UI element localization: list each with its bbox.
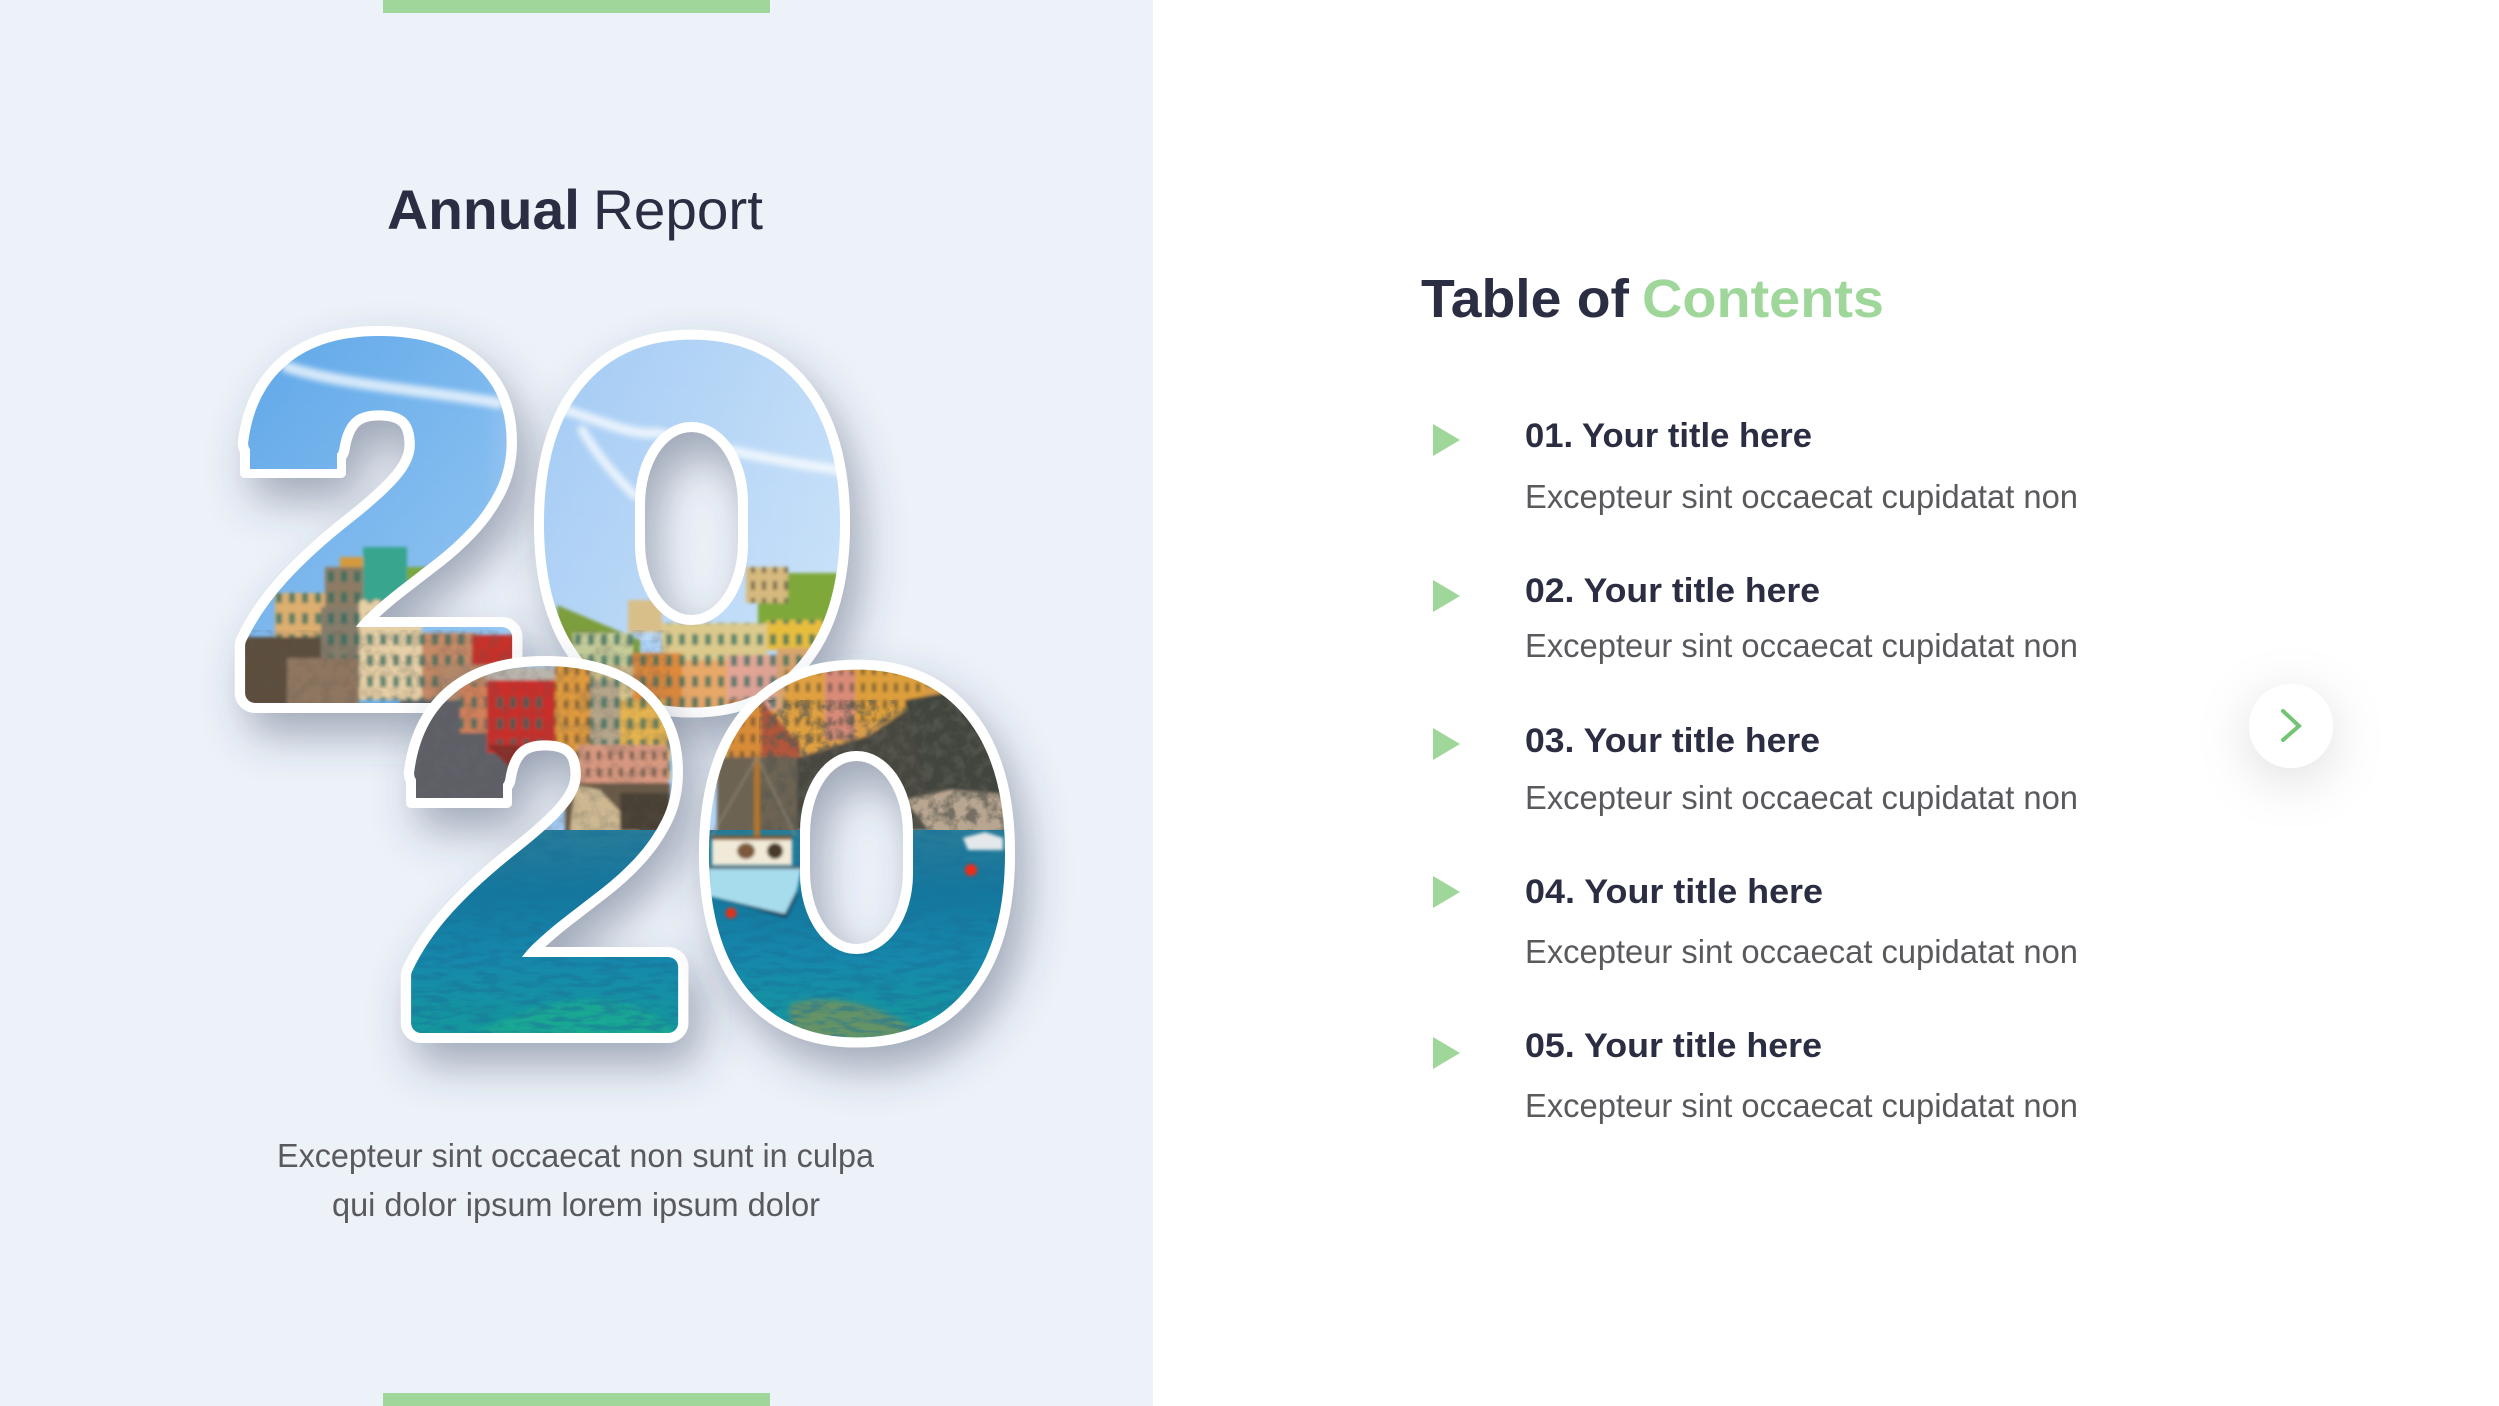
contents item 05: Excepteur sint occaecat cupidatat non <box>1525 1087 2078 1124</box>
contents item 03: 03. Your title here <box>1525 722 1820 760</box>
contents item 01 <box>1433 417 2078 515</box>
contents item 02: 02. Your title here <box>1525 572 1820 610</box>
icon: chevron <box>2283 711 2299 740</box>
icon: triangle <box>1433 424 1460 456</box>
contents item 03: Excepteur sint occaecat cupidatat non <box>1525 779 2078 816</box>
numeral: second 2 <box>384 650 730 1094</box>
contents item 05: 05. Your title here <box>1525 1027 1822 1065</box>
heading: table of contents <box>1421 269 1884 329</box>
heading: table of contents: Contents <box>1642 269 1884 329</box>
contents item 05 <box>1433 1027 2078 1124</box>
numeral: second 0 <box>683 654 1056 1098</box>
numeral: first 0 <box>518 323 891 768</box>
contents item 02 <box>1433 572 2078 664</box>
icon: triangle <box>1433 580 1460 612</box>
description text: qui dolor ipsum lorem ipsum dolor <box>332 1186 820 1223</box>
panel: annual report <box>0 0 1153 1406</box>
contents item 01: 01. Your title here <box>1525 417 1812 455</box>
bottom accent bar <box>383 1393 770 1406</box>
heading: annual report <box>387 178 763 241</box>
description text: Excepteur sint occaecat non sunt in culpa <box>277 1137 875 1174</box>
next button <box>2249 684 2333 768</box>
contents item 04: 04. Your title here <box>1525 873 1823 911</box>
contents item 01: Excepteur sint occaecat cupidatat non <box>1525 478 2078 515</box>
icon: triangle <box>1433 1037 1460 1069</box>
description text <box>277 1137 875 1223</box>
contents item 04: Excepteur sint occaecat cupidatat non <box>1525 933 2078 970</box>
heading: annual report: Annual <box>387 178 580 241</box>
numeral: first 2 <box>218 319 557 764</box>
contents item 03 <box>1433 722 2078 816</box>
heading: table of contents: Table of <box>1421 269 1630 329</box>
photo numerals: 2020 <box>200 300 1070 1070</box>
top accent bar <box>383 0 770 13</box>
icon: triangle <box>1433 728 1460 760</box>
icon: triangle <box>1433 876 1460 908</box>
contents item 02: Excepteur sint occaecat cupidatat non <box>1525 627 2078 664</box>
contents item 04 <box>1433 873 2078 970</box>
heading: annual report: Report <box>593 178 763 241</box>
